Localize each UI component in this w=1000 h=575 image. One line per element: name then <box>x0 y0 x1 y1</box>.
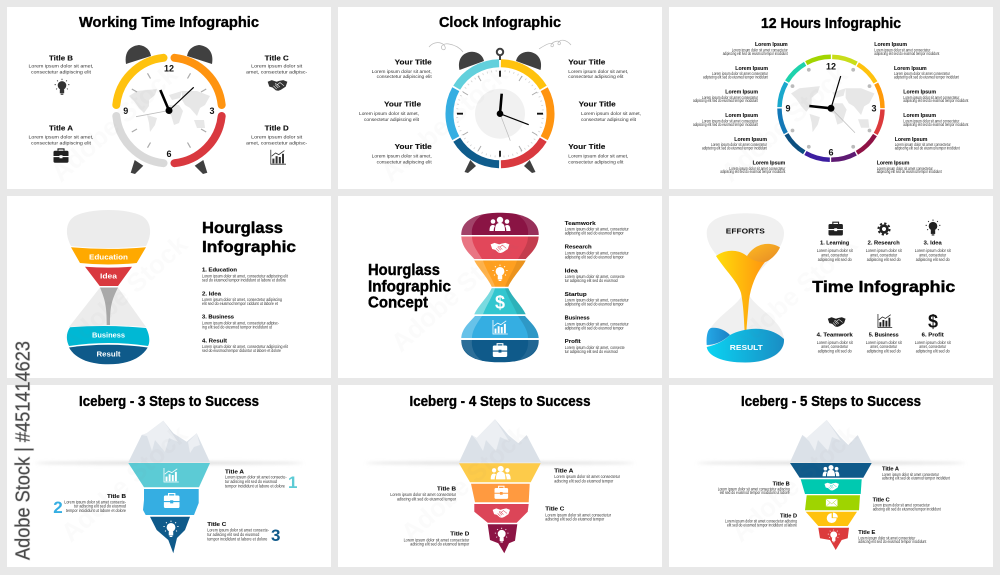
item: teamwork: Lorem ipsum dolor sit <box>817 340 853 345</box>
title: iceberg 5: Iceberg - 5 Steps to Success <box>741 394 921 410</box>
text: title A <box>882 467 951 481</box>
text: title D: elit sed do eiusmod tempor incididunt ut labore <box>727 523 797 528</box>
text: idea: Lorem ipsum dolor sit amet, consecte <box>565 274 625 279</box>
item: learning: amet, consectetur <box>821 252 849 258</box>
text: top right: Your Title <box>568 60 605 66</box>
text: title B: Lorem ipsum dolor sit amet consectetur <box>390 492 456 497</box>
hourglass: Education <box>89 254 128 261</box>
text: left 5 <box>702 137 768 151</box>
text: middle left: Your Title <box>384 102 421 108</box>
item: learning <box>817 222 853 262</box>
text: title D: adiscing elit sed do eiusmod tempor <box>410 542 470 547</box>
text: left 4: Lorem Ipsum <box>725 113 758 119</box>
text: title A: Lorem ipsum dolor sit amet, <box>28 134 94 140</box>
text: title C: Title C <box>265 56 289 62</box>
text: title B <box>718 481 790 495</box>
item: profit: amet, consectetur <box>919 344 947 349</box>
text: top left: consectetur adipiscing elit <box>377 74 433 79</box>
panel: clock infographic <box>338 7 662 189</box>
text: right 5 <box>895 137 960 151</box>
text: left 1: adipiscing elit sed do eiusmod tempor incididunt <box>723 51 788 56</box>
text: title C: Lorem ipsum dolor sit <box>251 64 303 68</box>
text: middle left <box>359 102 421 122</box>
text: top right <box>568 60 628 79</box>
heading: time infographic: Time Infographic <box>812 279 955 296</box>
title: iceberg 3: Iceberg - 3 Steps to Success <box>79 394 259 410</box>
heading: hourglass infographic: Hourglass <box>202 220 283 237</box>
panel: iceberg 3 steps <box>7 385 331 567</box>
icon: alarm clock: 3 <box>209 106 215 116</box>
item: research: Lorem ipsum dolor sit <box>866 248 902 253</box>
text: left 3: Lorem Ipsum <box>725 90 758 96</box>
text: left 6 <box>720 161 786 174</box>
text: middle right: consectetur adipiscing elit <box>581 117 637 122</box>
text: idea <box>202 291 282 306</box>
text: bottom left <box>372 144 433 164</box>
icon: alarm clock: 6 <box>166 149 172 159</box>
item: business <box>866 314 902 354</box>
text: title D: Lorem ipsum dolor sit amet consectetur <box>404 537 470 542</box>
text: title D: Title D <box>450 532 469 538</box>
text: business: 3. Business <box>202 315 234 321</box>
text: title E: Lorem ipsum dolor sit amet consectetur <box>858 535 916 540</box>
text: title C: tur adiscing elit sed do eiusmod <box>207 532 260 537</box>
text: middle left: Lorem ipsum dolor sit amet, <box>359 111 419 116</box>
title: iceberg 4: Iceberg - 4 Steps to Success <box>410 394 590 410</box>
text: title B: Lorem ipsum dolor sit amet, <box>28 64 94 68</box>
text: right 6: Lorem Ipsum <box>877 161 910 167</box>
iceberg <box>696 420 966 550</box>
segment: research <box>461 236 539 259</box>
text: bottom right <box>568 144 628 164</box>
hourglass: Idea <box>100 273 117 280</box>
panel: time infographic <box>669 196 993 378</box>
text: title B: Title B <box>437 487 456 493</box>
text: business: Lorem ipsum dolor sit amet, consectetur <box>565 321 629 326</box>
text: title B: tur adiscing elit sed do eiusmod <box>74 504 127 509</box>
text: left 1 <box>723 42 788 56</box>
text: left 2: Lorem ipsum dolor sit amet consectetur <box>712 71 768 76</box>
text: middle right <box>579 102 641 122</box>
text: idea: Idea <box>565 268 579 274</box>
text: result: sed do eiusmod tempor diduntur ut labore et dolore <box>202 348 281 353</box>
text: title D: Lorem ipsum dolor sit amet consectetur adiscing <box>725 519 797 524</box>
text: title C <box>873 497 941 512</box>
item: learning: adipiscing elit sed do <box>818 257 852 262</box>
heading: hourglass infographic concept: Infographic <box>368 279 451 296</box>
text: title D: Title D <box>780 514 797 520</box>
text: business: Lorem ipsum dolor sit amet, consectetur adipisc- <box>202 321 279 326</box>
text: left 3 <box>693 90 759 103</box>
iceberg <box>365 419 635 553</box>
text: right 3: Lorem Ipsum <box>903 90 936 96</box>
text: top right: Lorem ipsum dolor sit amet, <box>568 69 628 74</box>
text: title C: adiscing elit sed do eiusmod tempor <box>545 517 605 522</box>
hourglass: Result <box>96 351 121 358</box>
text: bottom left: Lorem ipsum dolor sit amet, <box>372 154 432 158</box>
text: middle right: Your Title <box>579 102 616 108</box>
vertical stock id label: Adobe Stock | #451414623 <box>12 341 34 560</box>
text: top left: Lorem ipsum dolor sit amet, <box>372 69 432 74</box>
text: middle right: Lorem ipsum dolor sit amet, <box>581 111 641 116</box>
item: learning: Lorem ipsum dolor sit <box>817 248 853 253</box>
text: title B: consectetur adipiscing elit <box>31 70 92 74</box>
item: research: 2. Research <box>868 241 900 247</box>
item: profit: 6. Profit <box>922 332 944 338</box>
text: middle left: consectetur adipiscing elit <box>364 117 420 122</box>
faint stock watermarks: Adobe Stock <box>395 419 533 548</box>
text: left 5: Lorem Ipsum <box>734 137 767 143</box>
text: title A: Title A <box>554 469 573 475</box>
text: right 3: adipiscing elit sed do eiusmod tempor incididunt <box>903 98 969 103</box>
text: title C <box>246 56 308 74</box>
text: title C: Title C <box>873 497 890 503</box>
text: top left <box>372 60 433 79</box>
faint stock watermarks: Adobe Stock <box>45 59 183 188</box>
text: right 6 <box>877 161 942 174</box>
icon: briefcase <box>54 149 68 163</box>
text: bottom left: Your Title <box>395 144 432 151</box>
panel: hourglass infographic <box>7 196 331 378</box>
text: title C: amet, consectetur adipisc- <box>246 70 308 74</box>
text: business <box>202 315 279 330</box>
text: left 1: Lorem ipsum dolor sit amet consectetur <box>732 47 788 52</box>
text: startup: adipiscing elit sed do eiusmod tempor <box>565 302 624 307</box>
text: bottom right: consectetur adipiscing elit <box>568 160 624 164</box>
segment: profit <box>461 340 539 362</box>
text: right 1 <box>874 42 940 56</box>
text: profit: Lorem ipsum dolor sit amet, consecte <box>565 345 625 350</box>
text: bottom left: consectetur adipiscing elit <box>377 160 433 164</box>
text: title C: tempor incididunt ut labore et dolore <box>207 536 268 541</box>
title: 12 hours: 12 Hours Infographic <box>761 16 901 32</box>
curly line left <box>429 43 463 52</box>
text: business: adipiscing elit sed do eiusmod tempor <box>565 325 624 330</box>
faint stock watermarks: Adobe Stock <box>55 419 193 548</box>
text: right 1: Lorem ipsum dolor sit amet consectetur <box>874 47 931 52</box>
text: title A: Title A <box>49 126 73 132</box>
text: title B: Lorem ipsum dolor sit amet consecte- <box>64 499 126 504</box>
text: right 4: Lorem Ipsum <box>903 113 936 119</box>
heading: hourglass infographic <box>202 220 296 256</box>
item: profit: adipiscing elit sed do <box>916 348 950 354</box>
text: right 4: Lorem ipsum dolor sit amet consectetur <box>903 118 960 124</box>
text: top left: Your Title <box>395 60 432 66</box>
text: teamwork: Teamwork <box>565 221 596 227</box>
text: result: 4. Result <box>202 338 227 344</box>
text: title A: consectetur adipiscing elit <box>31 140 92 146</box>
faint stock watermarks <box>45 59 863 548</box>
text: left 3: adipiscing elit sed do eiusmod tempor incididunt <box>693 98 759 103</box>
clock <box>760 38 902 179</box>
item: profit: Lorem ipsum dolor sit <box>915 340 951 345</box>
text: teamwork <box>565 221 629 236</box>
segment: business <box>461 316 539 338</box>
text: business: ing elit sed do eiusmod tempor incididunt ut <box>202 325 273 330</box>
text: title B: Title B <box>773 481 790 487</box>
item: research: adipiscing elit sed do <box>867 257 901 262</box>
clock: 12 <box>826 62 836 72</box>
text: title B: Title B <box>49 56 73 62</box>
text: title C: Lorem ipsum dolor sit amet consectetur <box>873 503 930 508</box>
faint stock watermarks: Adobe Stock <box>375 59 513 188</box>
item: idea: Lorem ipsum dolor sit <box>915 248 951 253</box>
text: title A <box>225 469 287 488</box>
text: profit <box>565 339 625 354</box>
text: title B: elit sed do eiusmod tempor incididunt ut labore <box>720 490 790 495</box>
text: title D <box>404 532 470 547</box>
heading: hourglass infographic concept: Hourglass <box>368 262 440 279</box>
text: left 2: adipiscing elit sed do eiusmod tempor incididunt <box>703 74 769 80</box>
icon: chart <box>271 150 286 164</box>
text: idea: tur adipiscing elit sed do eiusmod <box>565 278 618 283</box>
segment: idea <box>474 260 526 287</box>
text: teamwork: Lorem ipsum dolor sit amet, consectetur <box>565 227 629 232</box>
text: research: adipiscing elit sed do eiusmod tempor <box>565 254 624 259</box>
text: title D <box>246 126 308 146</box>
icon: handshake <box>268 80 287 91</box>
icon: alarm clock <box>116 45 222 174</box>
text: title A: Lorem ipsum dolor sit amet consectetur <box>882 472 939 477</box>
title: working time: Working Time Infographic <box>79 15 259 31</box>
text: startup: Startup <box>565 292 588 298</box>
text: title B: Title B <box>107 494 126 500</box>
panel: iceberg 5 steps <box>669 385 993 567</box>
text: title B: Lorem ipsum dolor sit amet consectetur adiscing <box>718 486 790 491</box>
text: right 6: Lorem ipsum dolor sit amet consectetur <box>877 166 933 171</box>
curly line right <box>539 40 571 49</box>
hourglass with sand <box>707 213 784 362</box>
icon: alarm clock: 12 <box>164 64 174 74</box>
text: right 4 <box>903 113 969 127</box>
text: title D: amet, consectetur adipisc- <box>246 140 308 146</box>
text: title C: Title C <box>207 522 226 528</box>
text: left 4: adipiscing elit sed do eiusmod tempor incididunt <box>693 122 759 127</box>
text: profit: tur adipiscing elit sed do eiusmod <box>565 349 618 354</box>
icon: bulb <box>55 79 69 95</box>
text: title C <box>207 522 269 541</box>
text: right 6: adipiscing elit sed do eiusmod tempor incididunt <box>877 169 942 174</box>
hourglass with sand: EFFORTS <box>726 227 765 236</box>
text: left 6: Lorem ipsum dolor sit amet consectetur <box>729 166 786 171</box>
text: title C: Lorem ipsum dolor sit amet consecte- <box>207 528 269 533</box>
panel: iceberg 4 steps <box>338 385 662 567</box>
text: right 5: adipiscing elit sed do eiusmod tempor incididunt <box>895 146 960 151</box>
item: business: Lorem ipsum dolor sit <box>866 340 902 345</box>
item: business: amet, consectetur <box>870 344 898 349</box>
icon: alarm clock <box>449 49 551 173</box>
faint stock watermarks: Adobe Stock <box>725 229 863 358</box>
item: business: adipiscing elit sed do <box>867 348 901 354</box>
text: idea: 2. Idea <box>202 291 222 297</box>
text: profit: Profit <box>565 339 581 345</box>
text: title E <box>858 530 927 544</box>
text: title B <box>28 56 94 74</box>
text: left 1: Lorem Ipsum <box>755 42 788 48</box>
text: right 2: Lorem ipsum dolor sit amet consectetur <box>894 71 950 76</box>
clock: 9 <box>785 104 791 114</box>
text: bottom right: Your Title <box>568 144 605 151</box>
text: title B: tempor incididunt ut labore et dolore <box>66 508 127 513</box>
segment: teamwork <box>461 213 539 235</box>
number 1: 1 <box>288 473 297 492</box>
text: startup <box>565 292 629 307</box>
panel: hourglass infographic concept <box>338 196 662 378</box>
item: idea: adipiscing elit sed do <box>916 257 950 262</box>
text: left 2: Lorem Ipsum <box>735 66 768 72</box>
text: left 3: Lorem ipsum dolor sit amet consectetur <box>702 95 758 100</box>
text: idea: Lorem ipsum dolor sit amet, consectetur adipiscing <box>202 297 282 302</box>
segment: startup: $ <box>495 292 505 312</box>
text: education: Lorem ipsum dolor sit amet, consectetur adipiscing elit <box>202 273 289 278</box>
text: right 2: Lorem Ipsum <box>894 66 927 72</box>
text: right 5: Lorem ipsum dolor sit amet consectetur <box>895 142 951 147</box>
heading: hourglass infographic concept: Concept <box>368 294 429 311</box>
clock: 6 <box>828 148 834 158</box>
text: right 3: Lorem ipsum dolor sit amet consectetur <box>903 95 960 100</box>
text: teamwork: adipiscing elit sed do eiusmod tempor <box>565 231 624 236</box>
heading: hourglass infographic concept <box>368 262 451 311</box>
item: idea <box>915 220 951 262</box>
item: idea: amet, consectetur <box>919 252 947 258</box>
text: title E: adiscing elit sed do eiusmod tempor incididunt <box>858 539 927 544</box>
text: left 6: Lorem Ipsum <box>753 161 785 167</box>
number 3: 3 <box>271 526 280 545</box>
text: research <box>565 245 629 259</box>
title: clock: Clock Infographic <box>439 15 561 31</box>
item: research: amet, consectetur <box>870 252 898 258</box>
item: teamwork: 4. Teamwork <box>817 332 853 338</box>
text: left 5: Lorem ipsum dolor sit amet consectetur <box>711 142 767 147</box>
text: education: 1. Education <box>202 268 237 274</box>
text: title A: adiscing elit sed do eiusmod tempor <box>554 478 614 483</box>
text: title A: tempor incididunt ut labore et dolore <box>225 483 286 488</box>
faint stock watermarks: Adobe Stock <box>385 229 523 358</box>
text: title C: Title C <box>545 507 564 513</box>
text: idea <box>565 268 625 283</box>
text: right 3 <box>903 90 969 103</box>
text: title A: adiscing elit sed do eiusmod tempor incididunt <box>882 476 951 481</box>
text: result: Lorem ipsum dolor sit amet, consectetur adipiscing elit <box>202 344 289 349</box>
text: left 2 <box>703 66 769 80</box>
text: title D: Title D <box>265 126 289 132</box>
text: education <box>202 268 289 282</box>
text: title B <box>64 494 127 513</box>
iceberg <box>34 421 304 553</box>
text: business: Business <box>565 316 590 322</box>
clock: 3 <box>871 104 877 114</box>
text: left 4: Lorem ipsum dolor sit amet consectetur <box>702 118 758 124</box>
text: title A <box>554 469 620 483</box>
text: left 5: adipiscing elit sed do eiusmod tempor incididunt <box>702 146 768 151</box>
text: left 6: adipiscing elit sed do eiusmod tempor incididunt <box>720 169 786 174</box>
text: bottom right: Lorem ipsum dolor sit amet, <box>568 154 628 158</box>
text: title B <box>390 487 456 501</box>
faint stock watermarks: Adobe Stock <box>725 419 863 548</box>
text: title A: Title A <box>225 469 244 475</box>
text: title C: adiscing elit sed do eiusmod tempor incididunt <box>873 507 941 512</box>
item: profit <box>915 312 951 354</box>
faint stock watermarks: Adobe Stock <box>715 59 853 188</box>
text: education: sed do eiusmod tempor incididunt ut labore et dolore <box>202 277 287 282</box>
text: title A <box>28 126 94 146</box>
heading: hourglass infographic: Infographic <box>202 239 296 256</box>
text: idea: elit sed do eiusmod tempor ciddunt ut labore et <box>202 301 279 306</box>
text: title C <box>545 507 611 522</box>
text: left 4 <box>693 113 759 127</box>
text: title A: Lorem ipsum dolor sit amet consecte- <box>225 475 287 480</box>
text: top right: consectetur adipiscing elit <box>568 74 624 79</box>
text: right 4: adipiscing elit sed do eiusmod tempor incididunt <box>903 122 969 127</box>
item: idea: 3. Idea <box>924 241 943 247</box>
text: title D: Lorem ipsum dolor sit <box>251 134 303 140</box>
item: learning: 1. Learning <box>820 241 849 247</box>
text: right 2: adipiscing elit sed do eiusmod tempor incididunt <box>894 74 960 80</box>
text: business <box>565 316 629 330</box>
text: title D <box>725 514 797 528</box>
text: right 1: Lorem Ipsum <box>874 42 907 48</box>
text: title A: tur adiscing elit sed do eiusmod <box>225 479 278 484</box>
text: title C: Lorem ipsum dolor sit amet consectetur <box>545 512 611 517</box>
item: teamwork: adipiscing elit sed do <box>818 348 852 354</box>
panel: 12 hours infographic <box>669 7 993 189</box>
text: result <box>202 338 289 353</box>
panel: working time infographic <box>7 7 331 189</box>
item: profit: $ <box>928 312 938 332</box>
text: research: Research <box>565 245 592 251</box>
item: business: 5. Business <box>869 332 899 338</box>
text: title B: adiscing elit sed do eiusmod tempor <box>397 496 456 501</box>
faint stock watermarks: Adobe Stock <box>55 229 193 358</box>
item: research <box>866 223 902 262</box>
segment: startup <box>474 288 526 314</box>
text: right 5: Lorem Ipsum <box>895 137 928 143</box>
item: teamwork <box>817 317 853 354</box>
hourglass <box>67 210 150 364</box>
text: right 1: adipiscing elit sed do eiusmod tempor incididunt <box>874 51 940 56</box>
text: right 2 <box>894 66 960 80</box>
text: startup: Lorem ipsum dolor sit amet, consectetur <box>565 298 629 303</box>
text: title A: Lorem ipsum dolor sit amet consectetur <box>554 474 620 479</box>
text: research: Lorem ipsum dolor sit amet, consectetur <box>565 250 629 255</box>
hourglass with sand: RESULT <box>730 343 763 352</box>
text: title A: Title A <box>882 467 899 473</box>
number 2: 2 <box>53 498 63 517</box>
icon: alarm clock: 9 <box>123 106 128 116</box>
item: teamwork: amet, consectetur <box>821 344 849 349</box>
hourglass: Business <box>92 332 125 340</box>
text: title E: Title E <box>858 530 876 536</box>
